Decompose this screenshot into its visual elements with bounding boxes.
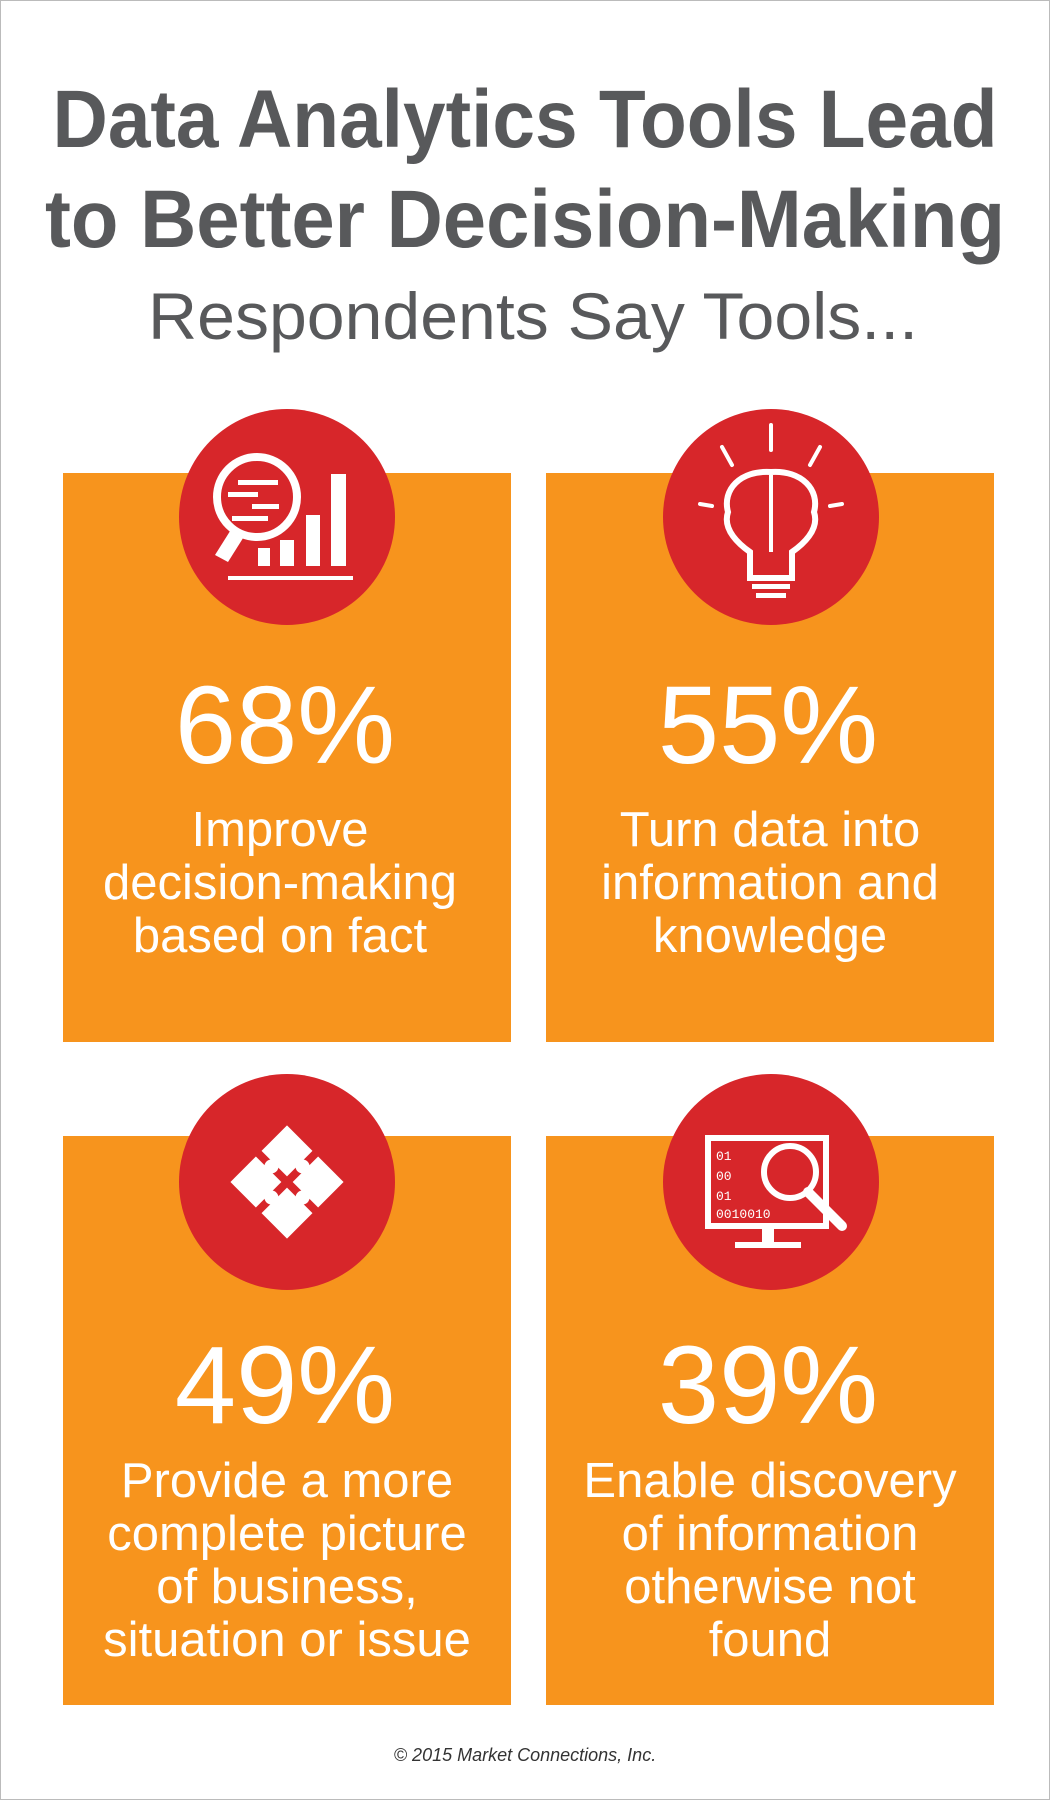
panel: 39% xyxy=(546,1074,994,1705)
icon: monitor magnifier: 01 xyxy=(716,1189,732,1204)
label: based on fact xyxy=(133,909,427,963)
label: knowledge xyxy=(653,909,887,963)
panel: 49% xyxy=(63,1074,511,1705)
label xyxy=(103,1454,471,1667)
title: to Better Decision-Making xyxy=(45,174,1005,265)
icon: magnifier chart xyxy=(179,409,395,625)
stat: 49% xyxy=(175,1324,395,1447)
panel: 55% xyxy=(546,409,994,1042)
label: Improve xyxy=(191,803,369,857)
footer: © 2015 Market Connections, Inc. xyxy=(394,1745,656,1765)
label: situation or issue xyxy=(103,1613,471,1667)
icon: brain bulb xyxy=(663,409,879,625)
icon: monitor magnifier: 00 xyxy=(716,1169,732,1184)
stat: 55% xyxy=(658,664,878,787)
icon: puzzle xyxy=(179,1074,395,1290)
panel: 68% xyxy=(63,409,511,1042)
subtitle: Respondents Say Tools... xyxy=(148,279,918,353)
label: information and xyxy=(601,856,939,910)
label xyxy=(601,803,939,963)
label xyxy=(103,803,457,963)
label: Enable discovery xyxy=(583,1454,957,1508)
label xyxy=(583,1454,957,1667)
title: Data Analytics Tools Lead xyxy=(52,74,998,165)
label: of business, xyxy=(156,1560,418,1614)
title xyxy=(45,74,1005,265)
icon: monitor magnifier xyxy=(663,1074,879,1290)
icon: monitor magnifier: 0010010 xyxy=(716,1207,771,1222)
label: of information xyxy=(622,1507,918,1561)
label: Turn data into xyxy=(620,803,920,857)
stat: 68% xyxy=(175,664,395,787)
label: complete picture xyxy=(107,1507,467,1561)
label: decision-making xyxy=(103,856,457,910)
icon: monitor magnifier: 01 xyxy=(716,1149,732,1164)
label: otherwise not xyxy=(624,1560,916,1614)
label: Provide a more xyxy=(121,1454,453,1508)
stat: 39% xyxy=(658,1324,878,1447)
label: found xyxy=(709,1613,831,1667)
